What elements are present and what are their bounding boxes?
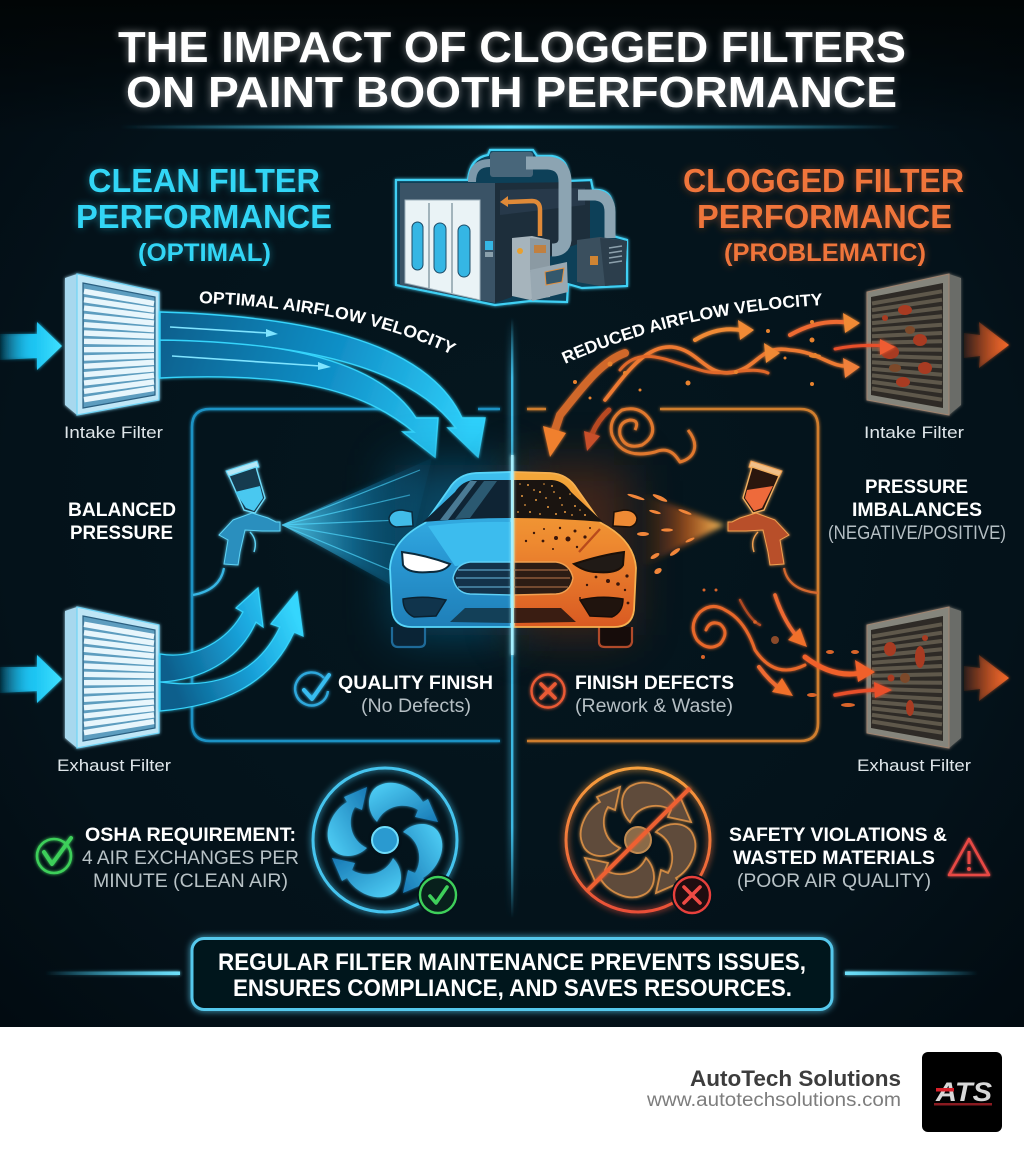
callout: maintenance message	[45, 938, 978, 1010]
footer: logo	[922, 1052, 1002, 1132]
label: balanced pressure: PRESSURE	[70, 522, 173, 544]
heading: clean filter performance: CLEAN FILTER	[88, 162, 320, 199]
clean exhaust filter	[65, 607, 159, 748]
label: reduced airflow velocity: REDUCED AIRFLOW VELOCITY	[561, 293, 822, 364]
text: osha requirement: MINUTE (CLEAN AIR)	[93, 870, 288, 892]
footer: brand text: www.autotechsolutions.com	[646, 1090, 901, 1111]
panel: clogged booth frame	[527, 409, 818, 741]
label: exhaust filter clogged: Exhaust Filter	[857, 756, 971, 775]
text: safety violations: SAFETY VIOLATIONS &	[729, 824, 947, 846]
spray cone: clogged	[627, 492, 725, 575]
label: optimal airflow velocity: OPTIMAL AIRFLOW VELOCITY	[200, 291, 457, 353]
heading: clean filter performance	[76, 162, 332, 267]
text: osha requirement	[82, 824, 299, 892]
arrows: exhaust flow clean	[160, 588, 303, 711]
title: ON PAINT BOOTH PERFORMANCE	[126, 68, 897, 117]
label: pressure imbalances: IMBALANCES	[852, 499, 982, 521]
footer: brand text: AutoTech Solutions	[690, 1066, 901, 1091]
icon: clogged fan	[566, 768, 713, 916]
callout: maintenance message: ENSURES COMPLIANCE, AND SAVES RESOURCES.	[233, 975, 792, 1002]
heading: clean filter performance: (OPTIMAL)	[138, 239, 271, 267]
text: safety violations: (POOR AIR QUALITY)	[737, 870, 931, 892]
car: clogged half	[514, 472, 637, 647]
heading: clogged filter performance: (PROBLEMATIC)	[724, 239, 926, 267]
icon: clean intake arrow	[0, 322, 62, 370]
label: quality finish: QUALITY FINISH	[338, 672, 493, 694]
heading: clogged filter performance: CLOGGED FILTER	[683, 162, 964, 199]
heading: clogged filter performance	[683, 162, 964, 267]
center divider	[509, 318, 515, 918]
arrows: reduced airflow	[543, 313, 895, 457]
footer: logo: ATS	[935, 1077, 992, 1107]
clean intake filter	[65, 274, 159, 415]
car: clean half	[389, 472, 511, 647]
label: balanced pressure	[68, 499, 176, 544]
icon: paint booth	[396, 150, 627, 305]
title: THE IMPACT OF CLOGGED FILTERS	[118, 23, 906, 72]
label: pressure imbalances: PRESSURE	[865, 476, 968, 498]
clogged exhaust filter	[867, 607, 961, 748]
label: quality finish: (No Defects)	[361, 696, 471, 717]
label: intake filter clogged: Intake Filter	[864, 423, 964, 442]
text: safety violations	[729, 824, 947, 892]
icon: clean fan	[313, 768, 459, 916]
particles: upper debris	[573, 320, 821, 400]
label: pressure imbalances	[828, 476, 1006, 544]
icon: upper turbulence swirl	[611, 409, 695, 462]
panel: clean booth frame	[192, 409, 500, 741]
icon: green compliance check	[37, 838, 71, 873]
label: quality finish	[338, 672, 493, 717]
text: osha requirement: 4 AIR EXCHANGES PER	[82, 847, 299, 869]
icon: warning triangle	[949, 839, 989, 875]
icon: clogged intake outflow arrow	[964, 322, 1009, 368]
icon: car centre seam	[511, 455, 514, 655]
particles: lower debris	[701, 588, 859, 707]
text: safety violations: WASTED MATERIALS	[733, 847, 935, 869]
title	[118, 23, 906, 117]
text: osha requirement: OSHA REQUIREMENT:	[85, 824, 296, 846]
icon: clogged spray gun	[728, 461, 818, 593]
arrows: optimal airflow	[160, 312, 485, 457]
icon: quality check	[295, 672, 329, 705]
callout: maintenance message: REGULAR FILTER MAINTENANCE PREVENTS ISSUES,	[218, 949, 806, 976]
label: balanced pressure: BALANCED	[68, 499, 176, 521]
arrows: lower turbulence	[693, 595, 892, 698]
label: finish defects: (Rework & Waste)	[575, 696, 733, 717]
icon: clean spray gun	[193, 461, 280, 595]
icon: clean exhaust arrow	[0, 655, 62, 703]
label: pressure imbalances: (NEGATIVE/POSITIVE)	[828, 523, 1006, 544]
label: intake filter clean: Intake Filter	[64, 423, 163, 442]
heading: clean filter performance: PERFORMANCE	[76, 198, 332, 235]
heading: clogged filter performance: PERFORMANCE	[697, 198, 952, 235]
clogged intake filter	[867, 274, 961, 415]
icon: finish defect x	[532, 674, 564, 708]
label: finish defects: FINISH DEFECTS	[575, 672, 734, 694]
icon: clogged exhaust outflow arrow	[964, 655, 1009, 701]
car: halo	[395, 465, 630, 635]
label: finish defects	[575, 672, 734, 717]
spray cone: clean	[282, 458, 432, 590]
label: exhaust filter clean: Exhaust Filter	[57, 756, 171, 775]
footer: brand text	[646, 1066, 901, 1111]
